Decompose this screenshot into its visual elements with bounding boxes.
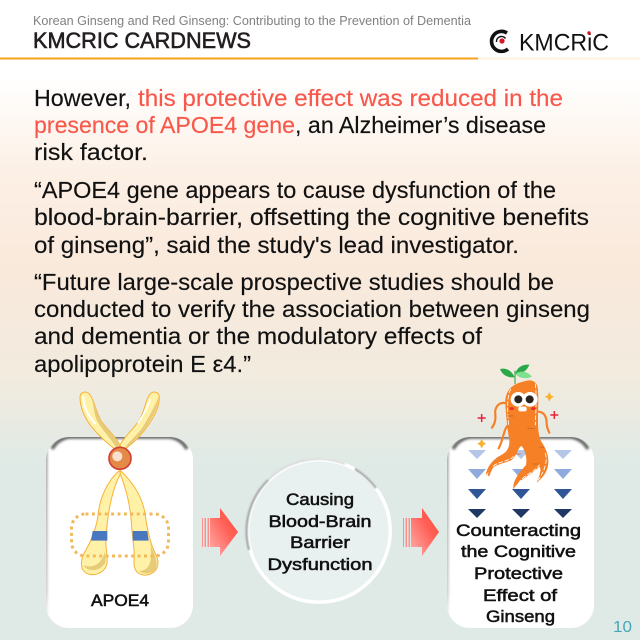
gene bands: [91, 531, 149, 541]
text block: paragraph 2: of ginseng”, said the study's lead investigator.: [34, 232, 519, 258]
sparkles: [545, 392, 554, 402]
panel: dysfunction circle: [246, 458, 392, 604]
text block: paragraph 2: “APOE4 gene appears to cause dysfunction of the: [34, 177, 556, 203]
root body: [486, 380, 548, 489]
text block: paragraph 3: conducted to verify the association between ginseng: [34, 296, 590, 322]
centromere: [109, 447, 131, 469]
decreasing triangles: [468, 450, 572, 518]
card text: Protective: [474, 564, 563, 583]
text block: paragraph 1: [34, 85, 563, 165]
lower left arm: [81, 471, 121, 575]
card text: Ginseng: [486, 607, 555, 626]
header rule: [0, 58, 640, 60]
card text: the Cognitive: [461, 542, 576, 561]
text block: paragraph 2: blood-brain-barrier, offsetting the cognitive benefits: [34, 204, 589, 230]
page number: 10: [613, 619, 632, 636]
panel: APOE4 card: [46, 392, 193, 628]
circle text: Causing: [286, 490, 354, 509]
label: APOE4: APOE4: [91, 591, 149, 610]
text block: paragraph 3: apolipoprotein E ε4.”: [34, 351, 251, 377]
circle text: Blood-Brain: [268, 512, 372, 531]
text block: paragraph 1: this protective effect was reduced in the: [138, 85, 563, 111]
lower right arm: [120, 471, 158, 575]
leaves: [500, 365, 532, 384]
icon: chromosome: [80, 392, 159, 575]
card text: Counteracting: [456, 521, 581, 540]
card text: Effect of: [483, 586, 557, 605]
circle text: Barrier: [290, 533, 350, 552]
panel: ginseng effect card: [447, 437, 594, 628]
upper left arm: [80, 392, 120, 451]
root arms: [489, 403, 549, 475]
logo: KMCRIC: KMCRiC: [519, 30, 609, 56]
cheeks and mouth: [509, 407, 514, 410]
header subtitle: Korean Ginseng and Red Ginseng: Contributing to the Prevention of Dementia: [33, 13, 472, 28]
text block: paragraph 1: , an Alzheimer’s disease: [295, 112, 546, 138]
circle text: [268, 490, 372, 574]
text block: paragraph 3: “Future large-scale prospective studies should be: [34, 269, 554, 295]
dotted highlight: [72, 514, 168, 556]
header title: KMCRIC CARDNEWS: [33, 28, 251, 53]
arrow: APOE4 to dysfunction: [202, 508, 238, 556]
text block: paragraph 1: However,: [34, 85, 131, 111]
text block: paragraph 2: [34, 177, 589, 258]
root highlights: [493, 384, 546, 483]
circle text: Dysfunction: [268, 555, 372, 574]
text block: paragraph 1: presence of APOE4 gene: [34, 112, 295, 138]
eyes: [511, 392, 526, 407]
wrinkles: [507, 416, 544, 464]
card text: [456, 521, 581, 626]
text block: paragraph 3: [34, 269, 590, 377]
arrow: dysfunction to effect: [403, 508, 439, 556]
text block: paragraph 1: risk factor.: [34, 139, 148, 165]
upper right arm: [120, 392, 159, 451]
header: [0, 13, 640, 60]
icon: ginseng character: [477, 365, 558, 489]
text block: paragraph 3: and dementia or the modulatory effects of: [34, 323, 483, 349]
